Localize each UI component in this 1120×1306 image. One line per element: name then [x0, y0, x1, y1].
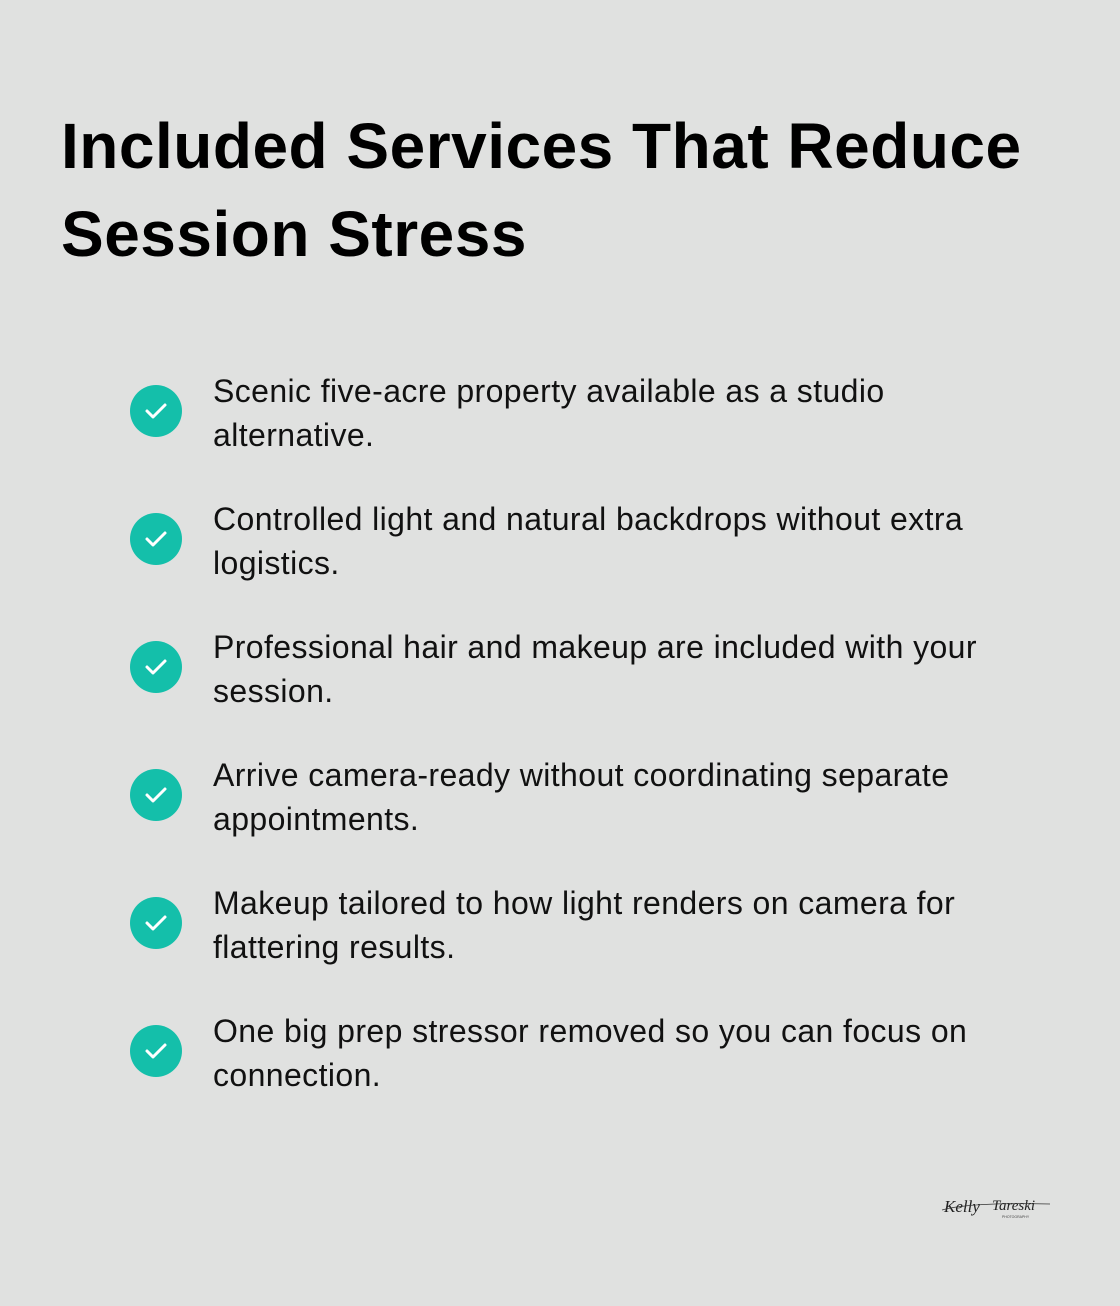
text: appointments.	[213, 801, 419, 837]
text	[213, 757, 949, 837]
text	[213, 885, 955, 965]
logo: signature: PHOTOGRAPHY	[1002, 1215, 1030, 1219]
text: alternative.	[213, 417, 374, 453]
text: Makeup tailored to how light renders on camera for	[213, 885, 955, 921]
text: One big prep stressor removed so you can focus on	[213, 1013, 967, 1049]
text	[213, 501, 963, 581]
text: connection.	[213, 1057, 381, 1093]
logo: signature: Tareski	[992, 1198, 1035, 1214]
item 3	[130, 629, 977, 709]
text: session.	[213, 673, 334, 709]
text: Controlled light and natural backdrops without extra	[213, 501, 963, 537]
title	[61, 110, 1022, 270]
text: Arrive camera-ready without coordinating separate	[213, 757, 949, 793]
icon: check	[130, 769, 182, 821]
item 1	[130, 373, 885, 453]
logo: signature	[942, 1197, 1050, 1219]
text	[213, 1013, 967, 1093]
title: Session Stress	[61, 198, 527, 270]
logo: signature: Kelly	[943, 1197, 980, 1216]
text: flattering results.	[213, 929, 455, 965]
icon: check	[130, 385, 182, 437]
text: logistics.	[213, 545, 340, 581]
item 6	[130, 1013, 967, 1093]
icon: check	[130, 513, 182, 565]
item 2	[130, 501, 963, 581]
text	[213, 373, 885, 453]
icon: check	[130, 641, 182, 693]
icon: check	[130, 1025, 182, 1077]
item 4	[130, 757, 949, 837]
text: Professional hair and makeup are included with your	[213, 629, 977, 665]
title: Included Services That Reduce	[61, 110, 1022, 182]
icon: check	[130, 897, 182, 949]
text: Scenic five-acre property available as a studio	[213, 373, 885, 409]
text	[213, 629, 977, 709]
item 5	[130, 885, 955, 965]
